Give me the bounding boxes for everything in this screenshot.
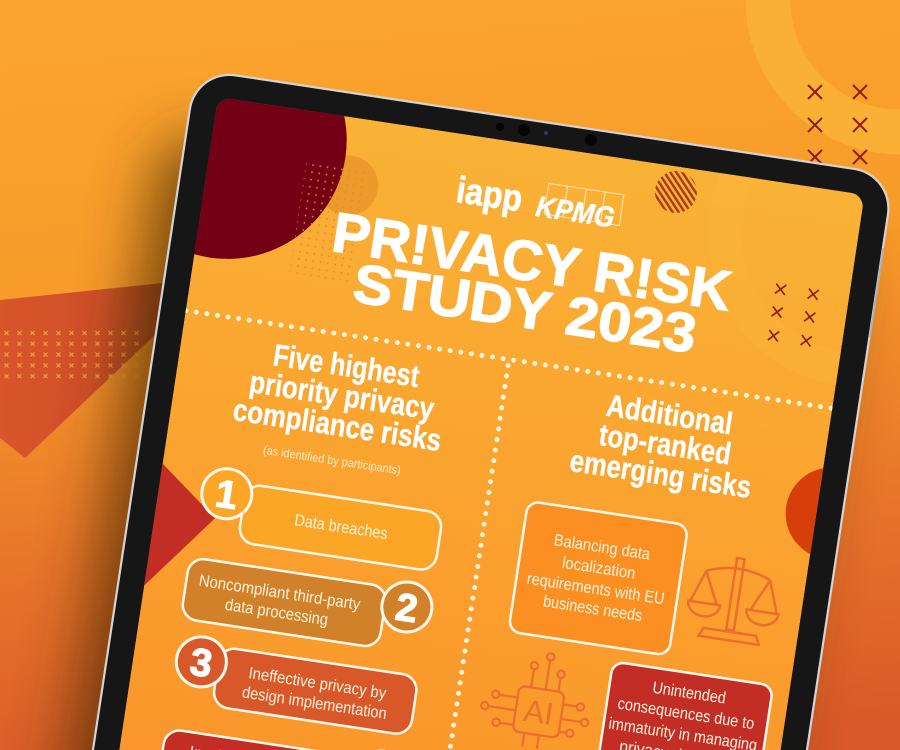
risk 3: design implementation — [241, 683, 388, 723]
emerging risk box 1 — [508, 501, 688, 656]
background triangle with x pattern — [0, 283, 163, 458]
emerging risk box 1: localization — [561, 554, 637, 583]
logo: iapp: iapp — [454, 169, 525, 219]
heading: right column: Additional — [604, 388, 735, 441]
emerging risk box 2: Unintended — [651, 679, 727, 708]
title: PR!VACY R!SK — [329, 200, 735, 322]
camera array — [496, 123, 597, 146]
icon: AI chip: AI — [521, 693, 556, 732]
logo: KPMG: KPMG — [534, 191, 617, 234]
risk 3: 3 — [187, 640, 215, 686]
side button — [869, 248, 884, 337]
risk 3 — [170, 633, 420, 736]
icon: scales — [687, 556, 780, 646]
heading: left column — [234, 344, 440, 451]
hatched circle — [655, 171, 697, 213]
risk 2: Noncompliant third-party — [198, 572, 362, 614]
subheading: (as identified by participants) — [262, 443, 402, 477]
emerging risk box 1: requirements with EU — [526, 570, 666, 608]
heading: left column: compliance risks — [231, 392, 444, 458]
emerging risk box 1: business needs — [542, 592, 643, 625]
risk 2: data processing — [224, 596, 329, 629]
peach circle — [326, 156, 378, 214]
risk 2 — [182, 558, 434, 648]
screen x marks — [768, 284, 819, 346]
dotted dividers — [185, 308, 833, 749]
risk 1: Data breaches — [293, 511, 389, 543]
risk 1 — [195, 465, 445, 572]
background x marks — [808, 85, 867, 164]
emerging risk box 1: Balancing data — [553, 531, 652, 564]
left red triangle — [144, 464, 215, 586]
risk 1: 1 — [213, 472, 240, 518]
risk 3: Ineffective privacy by — [247, 664, 388, 703]
risk 4 — [162, 729, 386, 750]
emerging risk box 2: consequences due to — [616, 695, 756, 733]
heading: right column: top-ranked — [597, 417, 733, 472]
dark red circle — [194, 98, 347, 259]
tablet — [92, 74, 890, 750]
heading: left column: Five highest — [271, 337, 422, 394]
emerging risk box 2 — [593, 661, 773, 750]
tablet shadow — [27, 134, 854, 750]
faint screen arc — [721, 173, 841, 384]
small ring behind bezel — [132, 684, 145, 710]
title: STUDY 2023 — [349, 252, 701, 365]
logo: KPMG — [534, 182, 624, 227]
heading: right column — [570, 395, 750, 498]
icon: AI chip — [480, 652, 590, 749]
heading: right column: emerging risks — [568, 443, 754, 505]
screen — [119, 98, 863, 750]
risk 2: 2 — [393, 586, 421, 631]
dot patterns — [290, 160, 370, 282]
heading: left column: priority privacy — [247, 364, 437, 427]
decorative arc top right — [768, 0, 900, 132]
right decorative circle — [786, 468, 824, 554]
